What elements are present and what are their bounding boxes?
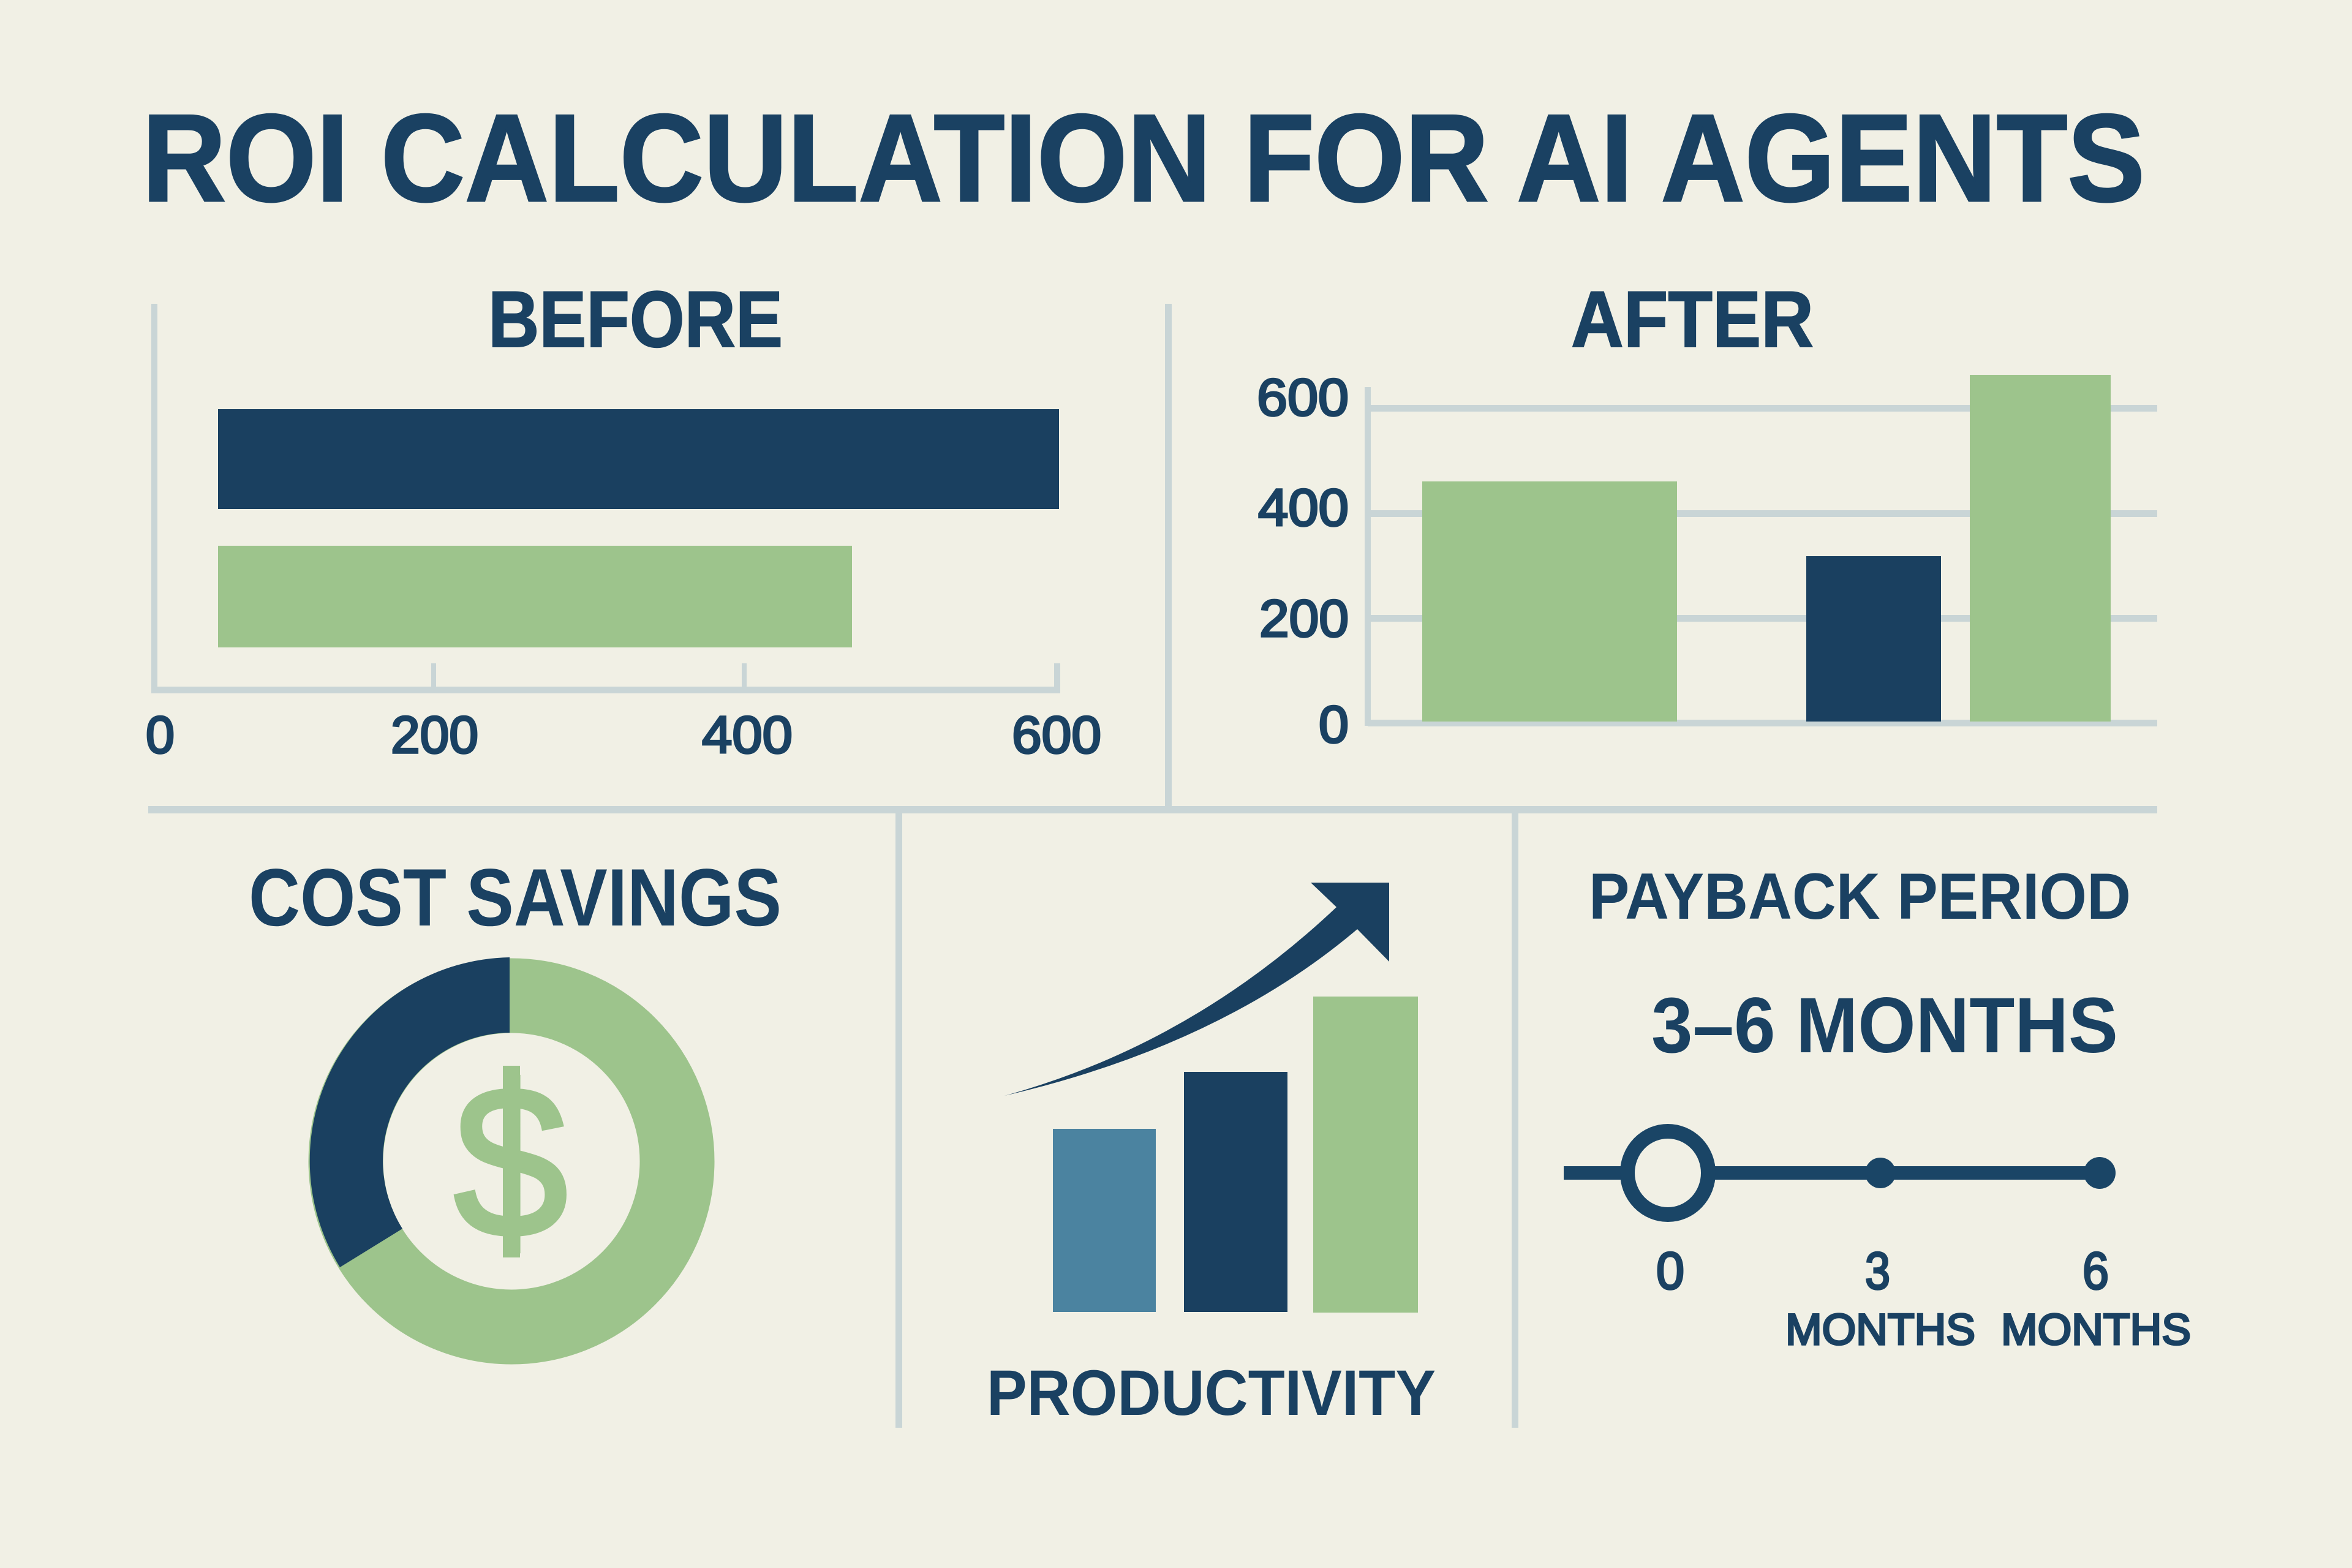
before axis labels: 0 (146, 706, 175, 764)
after axis labels: 400 (1258, 479, 1349, 537)
panel: payback period (1564, 859, 2191, 1354)
before axis labels (146, 706, 1101, 764)
after bar: green left (1422, 481, 1677, 722)
panel: before chart (146, 274, 1101, 764)
donut chart (310, 957, 677, 1327)
heading: productivity: PRODUCTIVITY (987, 1357, 1436, 1429)
bar: navy (1184, 1072, 1287, 1312)
timeline labels: MONTHS (2001, 1306, 2191, 1354)
before chart axes (151, 304, 1060, 693)
timeline labels: 3 (1865, 1242, 1890, 1300)
panel: productivity (987, 883, 1436, 1429)
heading: before: BEFORE (488, 274, 783, 364)
heading: cost savings: COST SAVINGS (249, 853, 782, 943)
after chart grid lines (1365, 387, 2157, 726)
after axis labels: 600 (1257, 369, 1349, 427)
timeline labels: 6 (2082, 1242, 2109, 1300)
bar: blue (1053, 1129, 1156, 1312)
heading: after: AFTER (1571, 274, 1814, 364)
after bar: navy (1806, 556, 1941, 722)
heading: payback period: PAYBACK PERIOD (1589, 859, 2131, 933)
icon: dollar sign: $ (454, 1042, 567, 1282)
arrow: growth (1005, 883, 1389, 1096)
before bar: green (218, 546, 852, 647)
timeline labels (1656, 1242, 2191, 1354)
value: 3-6 months: 3–6 MONTHS (1651, 982, 2118, 1069)
title: ROI CALCULATION FOR AI AGENTS (142, 89, 2145, 228)
bar: green (1313, 997, 1418, 1313)
after axis labels (1257, 369, 1349, 754)
after axis labels: 200 (1259, 590, 1349, 648)
panel: cost savings (249, 853, 782, 1327)
timeline labels: 0 (1656, 1242, 1684, 1300)
before bar: navy (218, 409, 1059, 509)
before axis labels: 200 (391, 706, 478, 764)
after axis labels: 0 (1319, 696, 1349, 754)
panel: after chart (1257, 274, 2157, 754)
timeline (1564, 1131, 2116, 1215)
before axis labels: 600 (1012, 706, 1101, 764)
before axis labels: 400 (702, 706, 793, 764)
timeline labels: MONTHS (1785, 1306, 1975, 1354)
after bar: green right (1970, 375, 2111, 722)
